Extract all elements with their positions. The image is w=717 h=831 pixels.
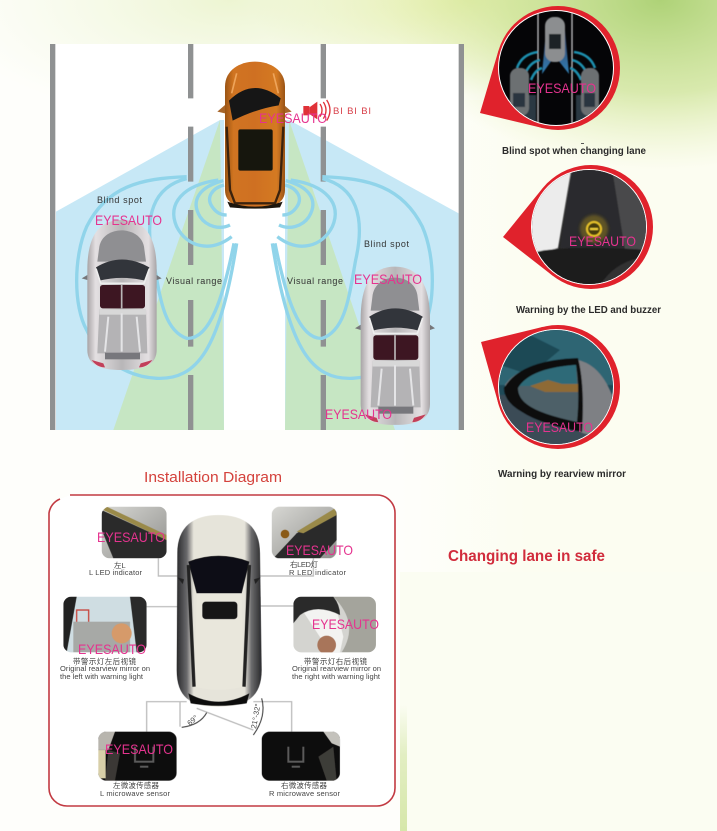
red pointer badge — [503, 188, 553, 276]
visual range zone right — [285, 120, 395, 430]
label: visual range left: Visual range — [166, 276, 222, 286]
heading: changing lane in safe: Changing lane in safe — [448, 548, 605, 565]
watermark: EYESAUTO — [528, 80, 596, 96]
sensor waves left — [77, 177, 237, 378]
angle label: 69 degrees: 69° — [185, 713, 200, 727]
thumbnail: R mirror — [293, 597, 376, 654]
L mirror label — [60, 656, 150, 681]
orange car — [217, 62, 292, 209]
caption tick — [581, 143, 584, 144]
thumbnail: R sensor — [262, 732, 340, 781]
blind spot zone left — [56, 120, 224, 430]
sensor waves right — [272, 177, 432, 378]
callout: blind spot when changing lane — [480, 0, 620, 144]
R LED label: R LED indicator — [289, 568, 346, 577]
watermark: EYESAUTO — [569, 233, 636, 249]
R LED label — [289, 559, 346, 577]
SUV top view — [177, 515, 262, 707]
L LED label — [89, 560, 142, 577]
watermark: EYESAUTO — [354, 271, 422, 287]
L sensor label: 左微波传感器 — [113, 780, 160, 790]
watermark: EYESAUTO — [526, 419, 593, 435]
R LED label: 右LED灯 — [290, 559, 318, 569]
photo: A-pillar LED — [532, 170, 646, 284]
blind spot zone right — [285, 120, 459, 430]
callout: LED and buzzer — [503, 165, 653, 290]
R mirror label: the right with warning light — [292, 672, 381, 681]
caption: blind spot when changing lane: Blind spot when changing lane — [502, 146, 646, 157]
L mirror label: the left with warning light — [60, 672, 144, 681]
L mirror label: Original rearview mirror on — [60, 664, 150, 673]
red pointer badge — [480, 50, 543, 128]
R mirror label: Original rearview mirror on — [292, 664, 381, 673]
R sensor label — [269, 780, 340, 798]
L LED label: 左L — [114, 560, 126, 570]
R sensor label: 右微波传感器 — [281, 780, 328, 790]
thumbnail: L mirror — [63, 597, 147, 652]
caption: LED and buzzer: Warning by the LED and buzzer — [516, 305, 661, 316]
panel: installation diagram — [49, 495, 395, 806]
watermark: EYESAUTO — [325, 406, 392, 422]
visual range zone left — [113, 120, 224, 430]
road surface — [50, 44, 464, 430]
silver car right — [355, 267, 435, 425]
L mirror label: 带警示灯左后视镜 — [73, 656, 136, 666]
connector lines — [140, 558, 313, 732]
R sensor label: R microwave sensor — [269, 789, 340, 798]
lane lines — [53, 44, 461, 430]
label: blind spot left: Blind spot — [97, 195, 142, 205]
photo: lanes and cars — [509, 13, 600, 123]
L sensor label: L microwave sensor — [100, 789, 170, 798]
watermark: EYESAUTO — [95, 212, 162, 228]
R mirror label: 带警示灯右后视镜 — [304, 656, 368, 666]
callout: rearview mirror — [481, 325, 620, 449]
buzzer label: BI BI BI — [333, 106, 371, 117]
watermark: EYESAUTO — [97, 529, 165, 545]
silver car left — [82, 220, 162, 370]
thumbnail: R LED — [272, 507, 337, 558]
L LED label: L LED indicator — [89, 568, 142, 577]
thumbnail: L LED — [102, 507, 167, 558]
watermark: EYESAUTO — [312, 616, 379, 632]
panel frame — [49, 495, 395, 806]
red pointer badge — [481, 327, 543, 404]
center clear lane — [224, 120, 285, 430]
label: blind spot right: Blind spot — [364, 239, 409, 249]
L sensor label — [100, 780, 170, 798]
watermark: EYESAUTO — [286, 542, 353, 558]
angle label: 21-32 degrees: 21°-32° — [249, 703, 262, 729]
heading: installation diagram: Installation Diagram — [144, 469, 282, 486]
buzzer icon — [303, 100, 330, 121]
watermark: EYESAUTO — [259, 110, 327, 126]
angle marks — [182, 698, 263, 735]
watermark: EYESAUTO — [78, 641, 146, 657]
road diagram panel — [50, 44, 464, 430]
thumbnail: L sensor — [98, 732, 177, 781]
photo: side mirror — [498, 330, 615, 445]
label: visual range right: Visual range — [287, 276, 343, 286]
caption: rearview mirror: Warning by rearview mirror — [498, 469, 626, 480]
watermark: EYESAUTO — [105, 741, 173, 757]
R mirror label — [292, 656, 381, 681]
